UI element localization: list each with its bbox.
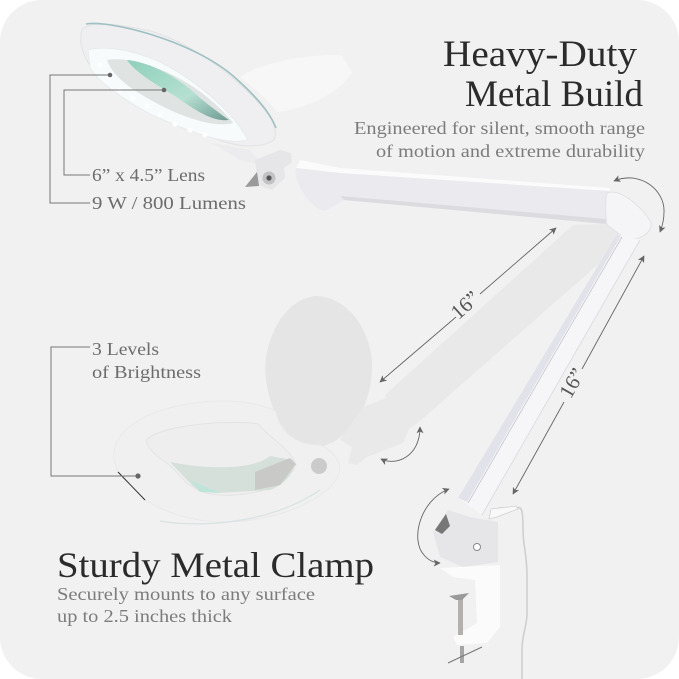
icon: clamp [440,565,500,663]
cable plug [489,506,518,519]
arrow: elbow rotation [614,178,664,232]
label: power: 9 W / 800 Lumens [92,193,246,213]
icon: top lamp head [81,23,276,146]
arrow: base rotation [418,489,449,563]
text: metal build description [354,118,645,161]
label: brightness: of Brightness [92,362,201,382]
label: brightness: 3 Levels [92,339,159,359]
label: lens size: 6” x 4.5” Lens [92,165,205,185]
callout: brightness leader [51,347,141,479]
label: lower arm 16 inches: 16” [446,286,484,324]
callout: lens leader [64,88,166,175]
text: clamp description: Securely mounts to any surface [57,584,315,604]
closed cover behind top lamp [240,55,352,112]
text: metal build description: Engineered for silent, smooth range [354,118,645,138]
icon: lower arm knuckle [340,398,410,465]
label: upper arm 16 inches: 16” [554,364,590,402]
icon: base joint [433,510,498,567]
callout: LED leader [50,73,112,203]
text: clamp description: up to 2.5 inches thick [57,606,232,626]
icon: bottom lamp cover [265,296,372,447]
lower arm (ghosted) [385,224,628,430]
heading: metal build [443,34,643,115]
label: brightness [92,339,201,382]
text: clamp description [57,584,315,626]
upper arm [296,160,610,224]
heading: metal build: Heavy-Duty [443,34,638,75]
elbow cap [606,192,651,239]
icon: bottom lamp head [114,401,340,524]
text: metal build description: of motion and extreme durability [376,141,645,161]
power cable [490,508,527,679]
icon: top swivel joint [212,143,292,190]
heading: clamp: Sturdy Metal Clamp [57,545,374,585]
arrow: lamp head rotation [381,427,420,461]
heading: metal build: Metal Build [465,74,643,115]
arrow: upper arm length [513,256,644,494]
lower arm (solid) [458,234,640,515]
arrow: lower arm length [380,228,556,382]
